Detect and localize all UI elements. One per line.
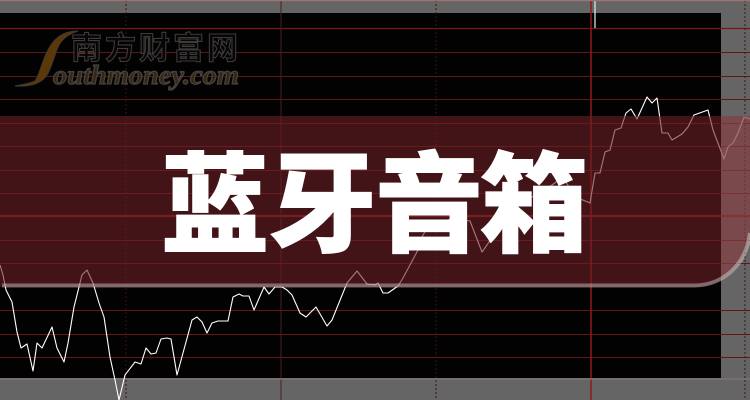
watermark: Southmoney logo	[15, 31, 239, 90]
watermark URL: outhmoney.com	[53, 60, 239, 90]
title character 1: 蓝	[161, 145, 269, 266]
icon: brown S swoosh	[15, 31, 78, 86]
title character 2: 牙	[269, 145, 377, 266]
translucent title banner	[0, 116, 750, 288]
watermark Chinese name: 南方财富网	[71, 31, 238, 66]
title	[161, 145, 588, 266]
title character 3: 音	[375, 145, 483, 266]
title character 4: 箱	[480, 145, 588, 266]
price line chart	[0, 97, 750, 400]
